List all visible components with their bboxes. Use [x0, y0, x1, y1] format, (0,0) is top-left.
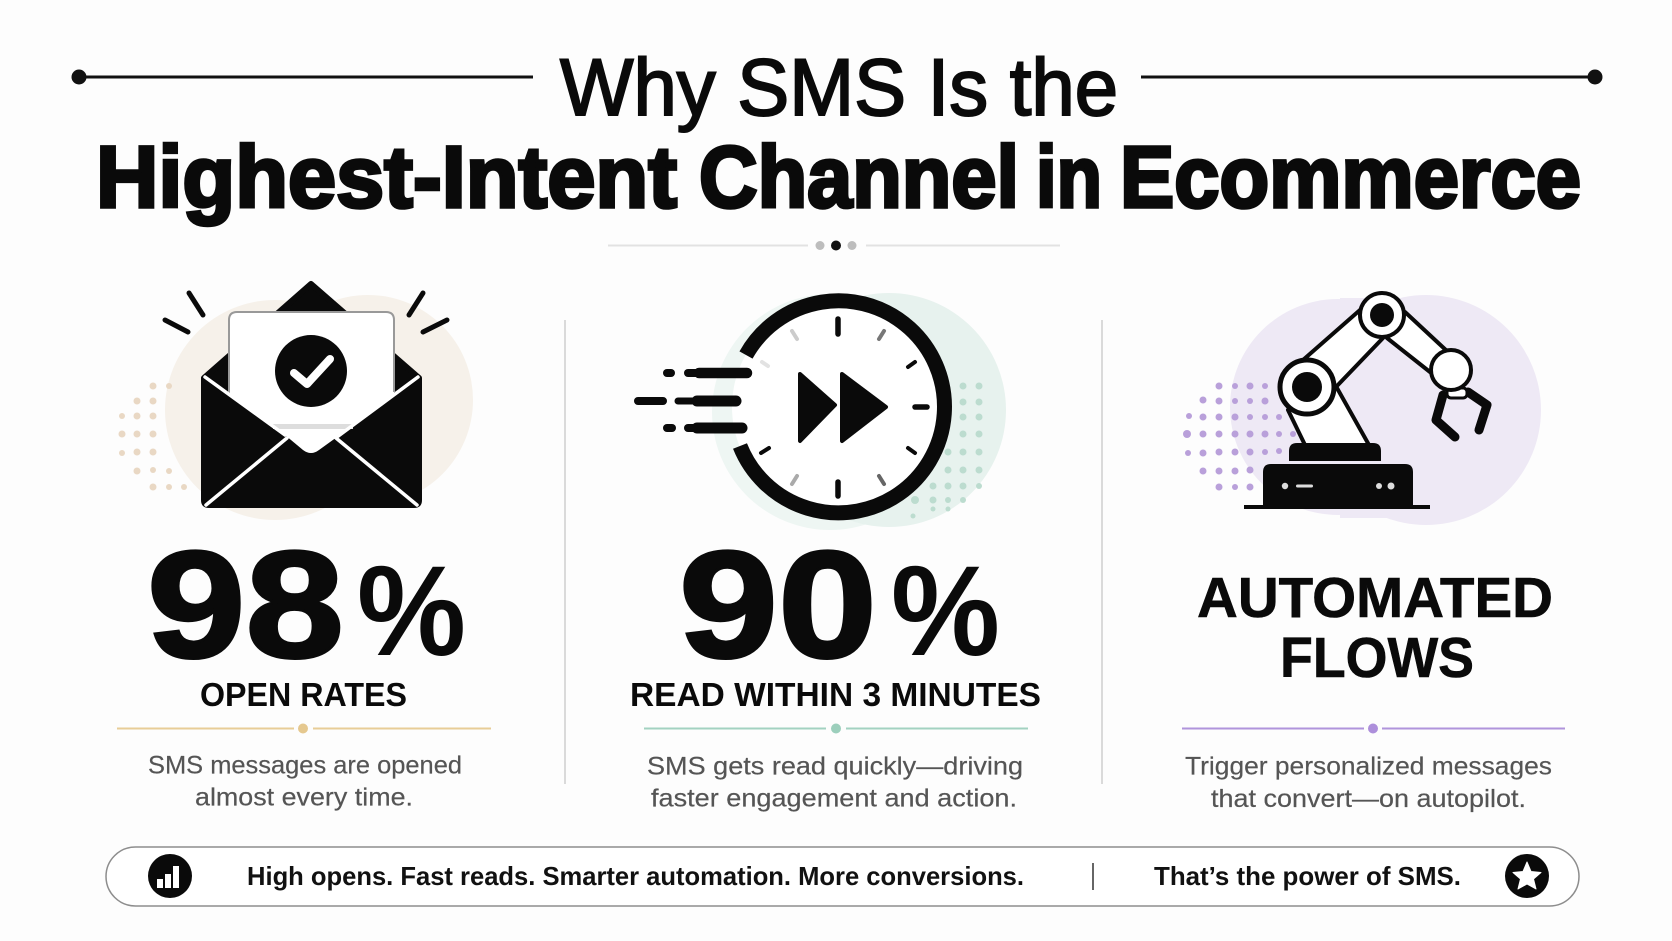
title line 2: Highest-Intent — [96, 129, 677, 226]
accent rule — [1182, 724, 1565, 734]
icon: open envelope with check — [118, 284, 473, 520]
description: Trigger personalized messages — [1185, 752, 1552, 780]
description: SMS gets read quickly—driving — [647, 752, 1023, 780]
accent rule — [644, 724, 1028, 734]
description — [1185, 752, 1552, 813]
heading: automated flows: FLOWS — [1280, 626, 1474, 690]
description: almost every time. — [195, 784, 413, 812]
panel: read within 3 minutes — [630, 293, 1041, 812]
description: SMS messages are opened — [148, 752, 462, 780]
stat: 90%: 90 — [679, 520, 877, 690]
stat: 98%: % — [357, 540, 466, 683]
description — [148, 752, 462, 812]
icon: fast-forward clock — [638, 293, 1006, 530]
panel: automated flows — [1182, 293, 1565, 813]
title line 2: Ecommerce — [1120, 129, 1581, 226]
stat: 98% — [147, 520, 466, 690]
title line 2: in — [1036, 129, 1102, 226]
title — [72, 43, 1602, 250]
title line 1: Why SMS Is the — [560, 43, 1118, 133]
closing text: That’s the power of SMS. — [1154, 861, 1461, 891]
label: open rates: OPEN RATES — [200, 676, 407, 713]
title line 2 — [96, 129, 1581, 226]
description: faster engagement and action. — [651, 784, 1017, 812]
icon: star — [1505, 854, 1549, 898]
summary text: High opens. Fast reads. Smarter automation. More conversions. — [247, 861, 1024, 891]
heading: automated flows — [1197, 566, 1553, 690]
icon: bar chart — [148, 854, 192, 898]
icon: robotic arm — [1183, 293, 1541, 525]
description: that convert—on autopilot. — [1211, 785, 1526, 813]
accent rule — [117, 724, 491, 734]
title line 2: Channel — [699, 129, 1019, 226]
description — [647, 752, 1023, 812]
label: read within 3 minutes: READ WITHIN 3 MINUTES — [630, 676, 1041, 713]
stat: 90% — [679, 520, 1000, 690]
stat: 98%: 98 — [147, 520, 344, 690]
summary bar — [106, 847, 1579, 906]
heading: automated flows: AUTOMATED — [1197, 566, 1553, 630]
panel: open rates — [117, 284, 491, 812]
stat: 90%: % — [891, 540, 1000, 683]
